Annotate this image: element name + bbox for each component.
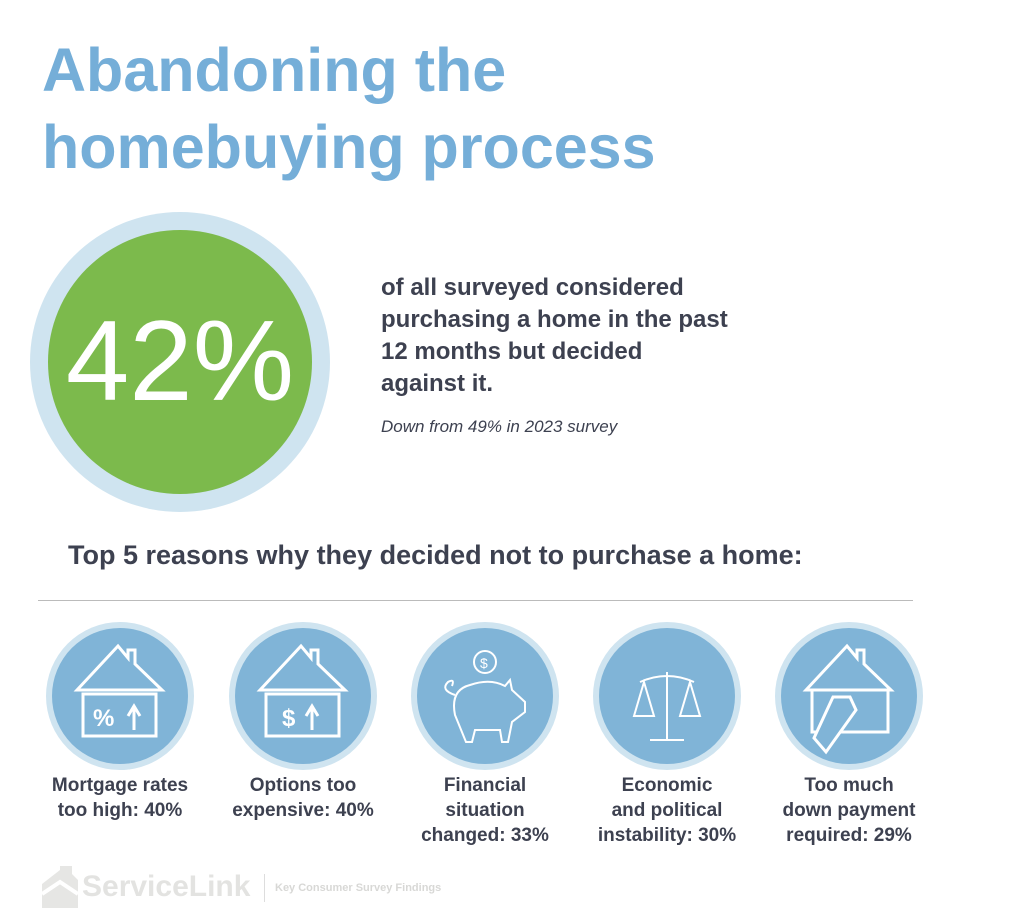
icon: house dollar <box>260 646 345 736</box>
footer logo: ServiceLink <box>82 870 250 903</box>
icon: house percent: % <box>93 705 114 732</box>
label 4: Economic <box>622 775 712 796</box>
icon: house dollar: $ <box>282 705 296 732</box>
description: purchasing a home in the past <box>381 306 728 333</box>
title: Abandoning the <box>42 36 506 104</box>
title: homebuying process <box>42 113 656 181</box>
label 2 <box>232 775 374 821</box>
footer logo: Key Consumer Survey Findings <box>275 882 441 894</box>
label 3: situation <box>445 800 525 821</box>
label 4: and political <box>612 800 722 821</box>
icon: piggy bank <box>445 651 525 742</box>
stat circle <box>30 212 330 512</box>
label 3: changed: 33% <box>421 825 549 846</box>
label 5: down payment <box>782 800 916 821</box>
label 1 <box>52 775 188 821</box>
icons row <box>46 622 923 770</box>
label 5 <box>782 775 916 846</box>
section heading: Top 5 reasons why they decided not to purchase a home: <box>68 540 803 570</box>
label 5: Too much <box>804 775 894 796</box>
title <box>42 36 656 181</box>
description: against it. <box>381 370 493 397</box>
label 3 <box>421 775 549 846</box>
label 2: expensive: 40% <box>232 800 374 821</box>
icon: piggy bank: $ <box>480 655 488 671</box>
description: 12 months but decided <box>381 338 642 365</box>
icon: house tag <box>806 646 891 752</box>
stat circle: 42% <box>66 298 294 425</box>
label 4 <box>598 775 736 846</box>
description <box>381 274 728 397</box>
label 5: required: 29% <box>786 825 912 846</box>
icon: scales <box>634 672 700 740</box>
label 1: too high: 40% <box>58 800 182 821</box>
label 1: Mortgage rates <box>52 775 188 796</box>
label 4: instability: 30% <box>598 825 736 846</box>
description: of all surveyed considered <box>381 274 684 301</box>
subnote: Down from 49% in 2023 survey <box>381 417 617 436</box>
footer logo <box>42 866 441 908</box>
icon: house percent <box>77 646 162 736</box>
label 3: Financial <box>444 775 526 796</box>
label 2: Options too <box>250 775 356 796</box>
